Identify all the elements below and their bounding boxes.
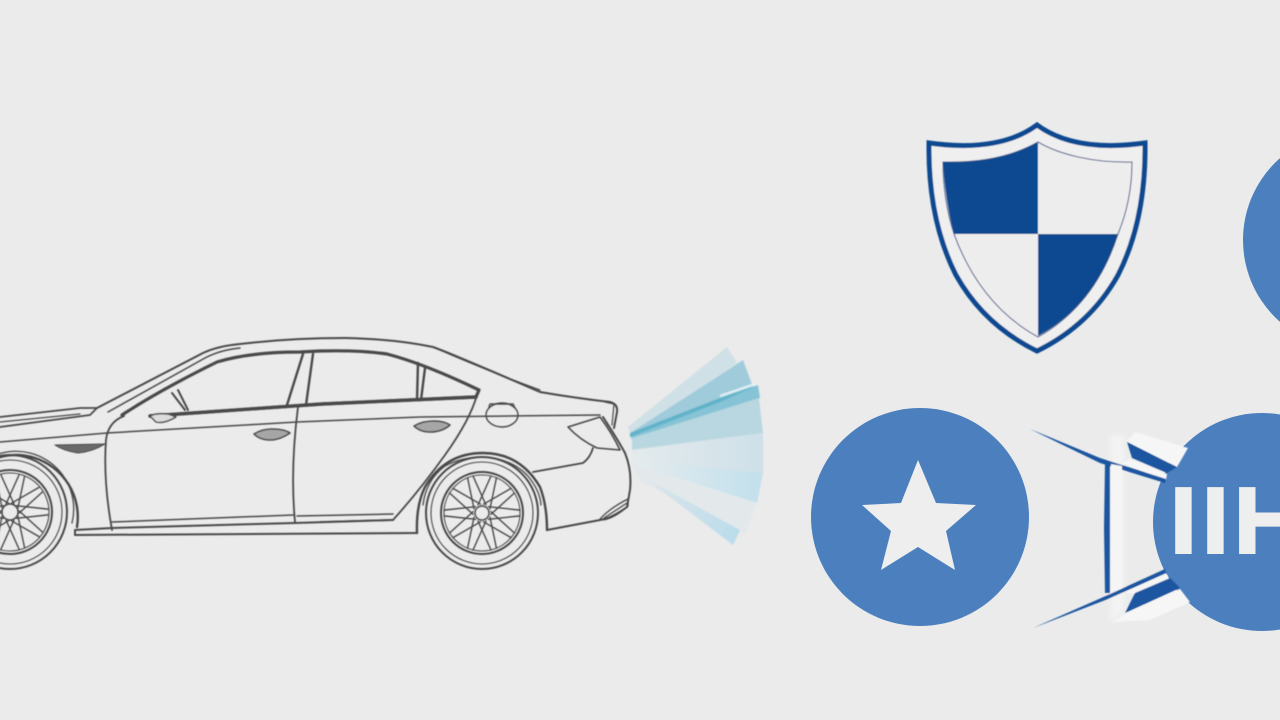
shield outer outline xyxy=(929,125,1145,351)
fuel door xyxy=(486,403,518,427)
door handles xyxy=(254,421,450,440)
shield dark quarter upper left xyxy=(943,142,1038,234)
blue circle with star xyxy=(811,408,1029,626)
door seams xyxy=(105,395,477,530)
blue circle, upper right xyxy=(1243,131,1280,349)
front wheel xyxy=(0,451,78,569)
side mirror xyxy=(150,414,176,422)
angular bracket emblem xyxy=(1030,429,1190,628)
shield dark quarter lower right xyxy=(1038,234,1118,336)
car body outline xyxy=(0,338,630,535)
tail light xyxy=(533,417,620,472)
shield inner field xyxy=(943,142,1132,337)
rear wheel xyxy=(417,453,547,569)
car line drawing xyxy=(0,338,630,569)
rear bumper reflector xyxy=(600,499,628,520)
icon: star xyxy=(862,460,976,570)
shield badge xyxy=(929,125,1145,351)
side windows xyxy=(122,351,479,416)
sensor signal fan xyxy=(628,347,763,545)
front fender vent xyxy=(55,444,105,453)
blue circle with IIH lettering xyxy=(1153,413,1280,631)
